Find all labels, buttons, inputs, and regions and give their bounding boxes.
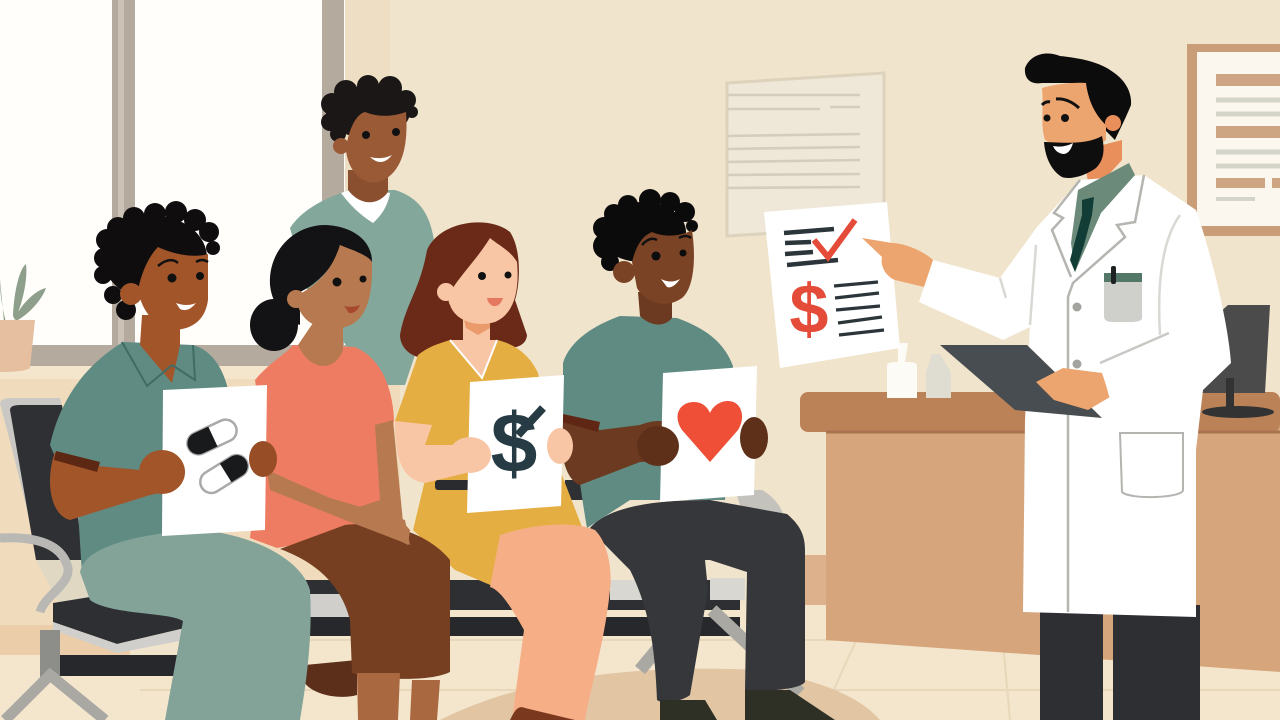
neck [638, 292, 672, 325]
lower pocket [1120, 433, 1183, 497]
hands holding pills sign [139, 441, 277, 494]
pants [80, 530, 311, 720]
face [296, 245, 372, 329]
eyes and mouth [478, 272, 512, 306]
icon: pills [184, 416, 252, 497]
icon: check mark [814, 220, 855, 257]
text lines [834, 282, 884, 335]
wall poster left [727, 73, 884, 236]
face [1042, 83, 1106, 148]
shirt [1071, 163, 1135, 272]
sign: bill with check and dollar [764, 202, 900, 368]
sign: heart [660, 366, 757, 502]
sign: pills [162, 385, 267, 536]
collar [122, 342, 195, 386]
neckline [450, 340, 497, 378]
ponytail [250, 299, 298, 351]
pants [280, 524, 450, 679]
face [632, 230, 694, 304]
bottles on desk [887, 343, 951, 398]
tie [1070, 197, 1094, 272]
lapels [1052, 175, 1144, 612]
person: woman with yellow dress [395, 222, 611, 720]
hair back [400, 222, 527, 358]
doctor [919, 53, 1231, 720]
shirt [290, 190, 436, 385]
buttons [1072, 302, 1082, 368]
neck [1083, 140, 1122, 195]
eyes and mouth [332, 276, 366, 313]
lab coat [1023, 175, 1231, 617]
beard [1044, 136, 1104, 178]
person: woman with salmon shirt [250, 225, 450, 720]
reception desk [800, 392, 1280, 672]
text lines [784, 229, 838, 265]
icon: dollar with slash: $ [491, 396, 537, 490]
hair side [445, 236, 490, 290]
icon: dollar: $ [790, 270, 828, 348]
arm [268, 420, 410, 545]
icon: heart [678, 401, 742, 462]
dress [395, 340, 582, 587]
coat sleeve arm [919, 227, 1050, 340]
pants [590, 500, 805, 702]
wall poster right [1187, 44, 1280, 236]
collar [341, 190, 390, 223]
floor [0, 605, 1280, 720]
doctor holding hand and cuff [1036, 333, 1203, 410]
hair [321, 75, 418, 142]
eyes and smile [362, 128, 400, 162]
face [346, 112, 407, 183]
hair [94, 201, 220, 320]
computer monitor [1200, 305, 1274, 418]
neck [463, 312, 490, 362]
shirt [50, 342, 229, 575]
coat pocket [1104, 273, 1142, 322]
face [138, 247, 208, 330]
eyes and brows [1042, 99, 1079, 122]
eyes and smile [158, 260, 208, 310]
hands holding heart sign [637, 417, 768, 466]
shoes [660, 690, 835, 720]
belt [435, 480, 475, 490]
forearm [395, 421, 485, 483]
shirt [250, 345, 394, 548]
person: man with teal shirt and heart sign [561, 189, 835, 720]
clipboard [940, 345, 1102, 418]
bench seat and frame [0, 398, 800, 720]
leg [490, 525, 611, 720]
face [449, 238, 518, 324]
shoe [303, 660, 357, 697]
hair [270, 225, 372, 325]
icon: potted plant [0, 264, 46, 372]
arm [50, 452, 185, 520]
sign: crossed dollar [467, 375, 564, 513]
hands holding dollar sign [449, 428, 573, 473]
legs [1040, 605, 1200, 720]
shirt [563, 316, 733, 528]
sleeve shadow lines [1000, 215, 1180, 335]
window [0, 0, 370, 379]
person: standing man at the back [290, 75, 436, 385]
hair [593, 189, 698, 271]
person: man with teal shirt and pills sign [50, 201, 311, 720]
doctor pointing hand [862, 238, 933, 287]
neck [348, 170, 388, 202]
mouth [1053, 143, 1073, 154]
neck [140, 315, 180, 383]
arm [561, 420, 678, 485]
hair [1025, 53, 1131, 140]
eyes and smile [642, 236, 691, 287]
neck [298, 320, 343, 366]
legs [357, 673, 440, 720]
